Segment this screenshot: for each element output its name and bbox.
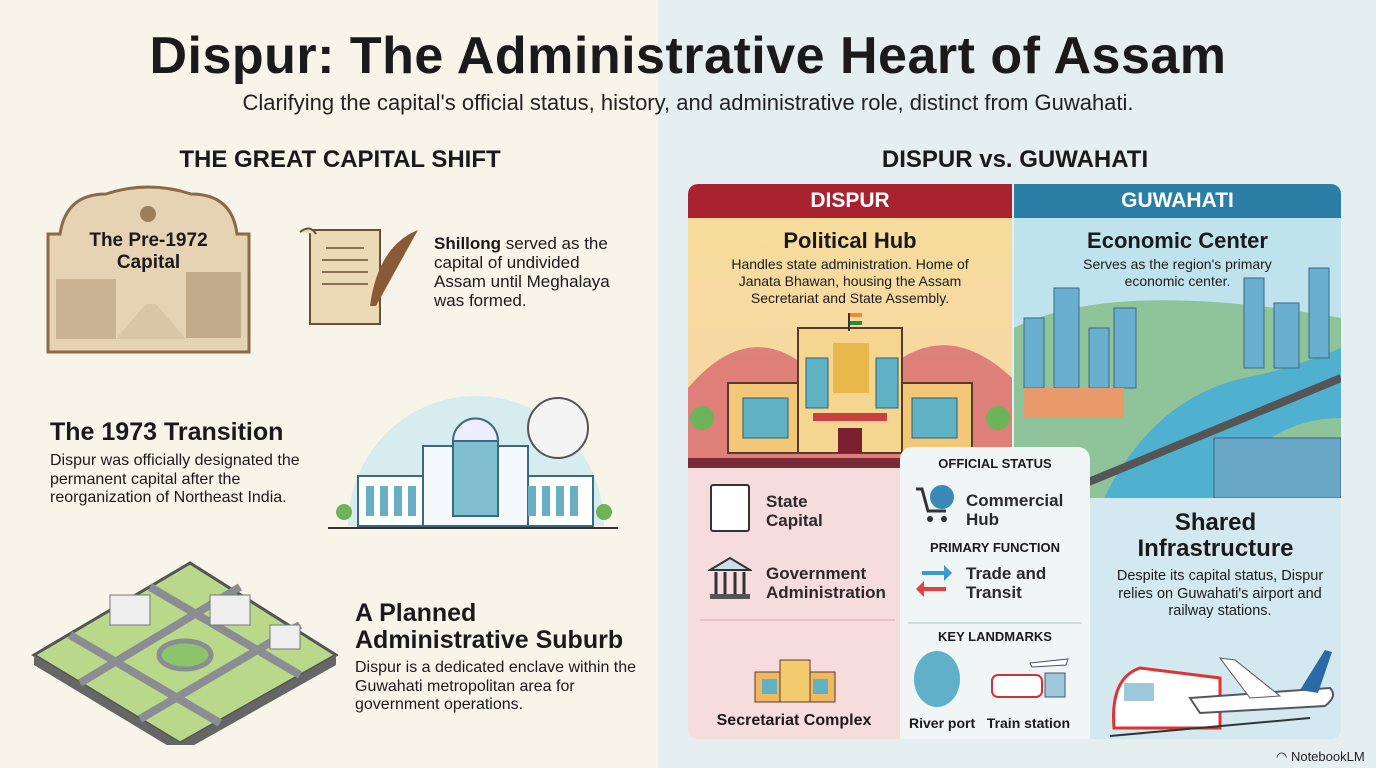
text: government administration: Administration [766, 583, 886, 602]
text: state capital [766, 492, 823, 530]
icon: trade arrows [916, 565, 952, 597]
dispur lower panel [688, 468, 1012, 739]
guwahati lower panel: shared infrastructure [1014, 498, 1341, 739]
text: commercial hub: Hub [966, 510, 999, 529]
dispur illustration: political hub: Handles state administration. Home of Janata Bhawan, housing the Assam Secretariat and State Assembly. [731, 256, 969, 306]
heading: planned suburb [355, 599, 623, 654]
middle panel: official status: PRIMARY FUNCTION [930, 540, 1060, 555]
guwahati lower panel: shared infrastructure: Infrastructure [1137, 535, 1294, 562]
heading: planned suburb: A Planned [355, 599, 476, 627]
guwahati illustration: economic center [1014, 218, 1341, 498]
guwahati lower panel: shared infrastructure: Shared [1175, 509, 1256, 536]
illustration: planned city grid [31, 561, 338, 745]
text: secretariat complex: Secretariat Complex [717, 712, 871, 729]
icon: train station [991, 658, 1069, 698]
guwahati lower panel: shared infrastructure: Despite its capital status, Dispur relies on Guwahati's airport and railway stations. [1117, 568, 1323, 619]
text: landmark labels: River port Train station [909, 715, 1070, 731]
branding: NotebookLM: ◠ NotebookLM [1276, 749, 1365, 764]
middle panel: official status: KEY LANDMARKS [938, 629, 1052, 644]
icon: secretariat complex [754, 660, 836, 702]
icon: cart globe [916, 485, 954, 522]
text: state capital: Capital [766, 511, 823, 530]
heading: 1973 transition: The 1973 Transition [50, 418, 283, 446]
subtitle: Clarifying the capital's official status, history, and administrative role, distinct from Guwahati. [242, 90, 1134, 115]
dispur illustration: political hub [688, 218, 1012, 468]
icon: river port [914, 651, 960, 707]
heading: dispur vs guwahati: DISPUR vs. GUWAHATI [882, 146, 1148, 173]
panel: comparison [688, 184, 1341, 739]
text: political hub: Political Hub [783, 228, 917, 253]
heading: planned suburb: Administrative Suburb [355, 626, 623, 654]
text: trade and transit [966, 564, 1046, 602]
text: commercial hub: Commercial [966, 491, 1063, 510]
plaque: pre-1972 capital: The Pre-1972 [89, 230, 208, 251]
text: government administration [766, 564, 886, 602]
illustration: government building with seal [328, 396, 618, 529]
heading: great capital shift: THE GREAT CAPITAL SHIFT [179, 146, 501, 173]
middle panel: official status [900, 447, 1090, 739]
text: commercial hub [966, 491, 1063, 529]
text: trade and transit: Transit [966, 583, 1022, 602]
plaque: pre-1972 capital [46, 186, 250, 354]
dispur header: DISPUR [810, 189, 890, 212]
guwahati illustration: economic center: Serves as the region's primary economic center. [1083, 256, 1272, 289]
icon: train and plane [1110, 650, 1334, 737]
title: Dispur: The Administrative Heart of Assam [149, 27, 1227, 85]
guwahati header [1014, 184, 1341, 218]
icon: government building [708, 556, 752, 599]
text: 1973: Dispur was officially designated the permanent capital after the reorganization of Northeast India. [50, 452, 300, 506]
text: planned suburb: Dispur is a dedicated enclave within the Guwahati metropolitan area for government operations. [355, 659, 636, 713]
icon: scroll and quill [299, 228, 418, 325]
plaque: pre-1972 capital: Capital [117, 252, 180, 273]
icon: document [710, 484, 750, 532]
middle panel: official status: OFFICIAL STATUS [938, 456, 1052, 471]
text: government administration: Government [766, 564, 866, 583]
dispur header [688, 184, 1012, 218]
text: state capital: State [766, 492, 808, 511]
text: trade and transit: Trade and [966, 564, 1046, 583]
guwahati header: GUWAHATI [1121, 189, 1234, 212]
text: economic center: Economic Center [1087, 228, 1268, 253]
text: shillong: Shillong served as the capital of undivided Assam until Meghalaya was formed. [434, 234, 610, 310]
